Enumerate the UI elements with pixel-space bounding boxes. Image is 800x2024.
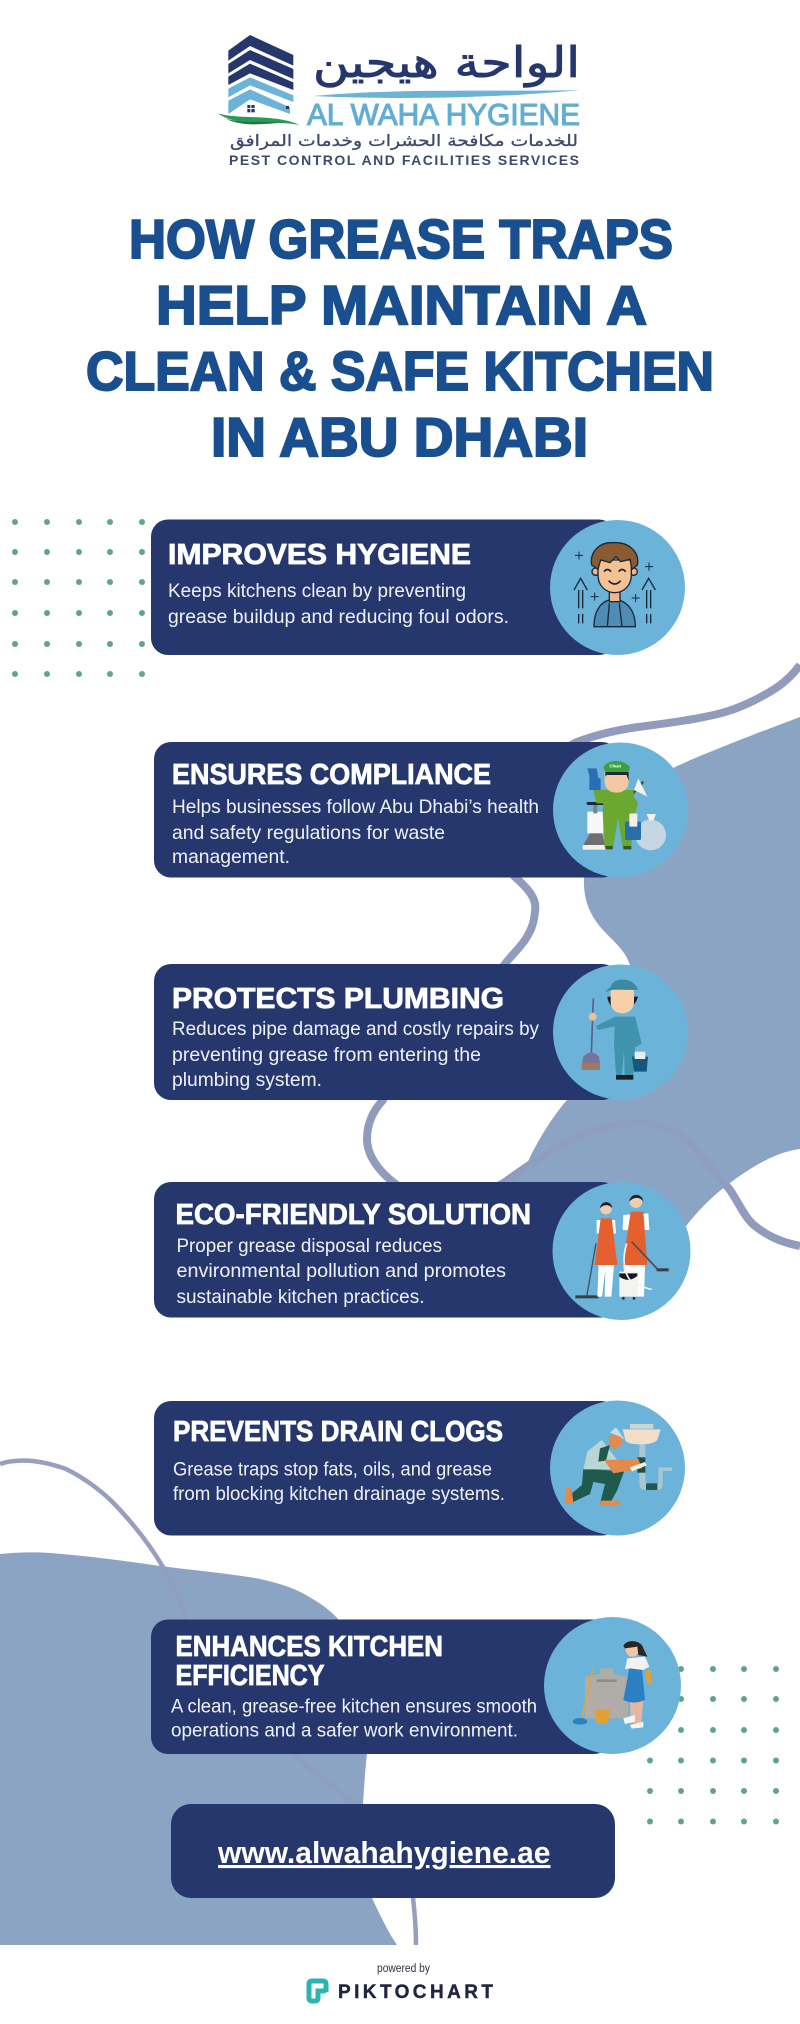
logo: Al Waha Hygiene <box>218 35 580 168</box>
logo: Arabic tagline: للخدمات مكافحة الحشرات وخدمات المرافق <box>230 131 578 151</box>
logo: English name: AL WAHA HYGIENE <box>307 98 580 132</box>
text: ensures compliance <box>172 796 539 868</box>
logo mark: building chevrons <box>218 35 300 125</box>
text: eco-friendly solution: sustainable kitchen practices. <box>176 1286 424 1308</box>
title: HOW GREASE TRAPS <box>129 209 673 270</box>
icon: plumber fixing a sink <box>564 1424 672 1505</box>
heading: ensures compliance: ENSURES COMPLIANCE <box>172 759 491 791</box>
text: prevents drain clogs: Grease traps stop fats, oils, and grease <box>173 1458 492 1480</box>
panel: improves hygiene <box>151 520 685 655</box>
icon circle <box>552 1182 690 1320</box>
title <box>86 209 714 468</box>
text: enhances kitchen efficiency: operations and a safer work environment. <box>171 1720 518 1742</box>
heading: eco-friendly solution: ECO-FRIENDLY SOLUTION <box>176 1199 531 1231</box>
icon circle <box>553 742 688 878</box>
text: protects plumbing <box>172 1018 539 1091</box>
text: ensures compliance: Helps businesses follow Abu Dhabi’s health <box>172 796 539 818</box>
footer: powered by Piktochart <box>309 1963 493 2003</box>
logo: swoosh <box>313 90 580 98</box>
icon: happy clean man with arrows <box>574 543 655 627</box>
decorative curve: lower left <box>0 1460 416 1945</box>
icon circle <box>550 1400 685 1536</box>
text: prevents drain clogs: from blocking kitchen drainage systems. <box>173 1483 505 1505</box>
title: IN ABU DHABI <box>211 407 588 468</box>
logo: Arabic name: الواحة هيجين <box>313 38 580 87</box>
heading: enhances kitchen efficiency: EFFICIENCY <box>176 1660 324 1692</box>
text: eco-friendly solution <box>176 1235 506 1308</box>
panel: eco-friendly solution <box>154 1182 690 1320</box>
call to action: website <box>171 1804 615 1898</box>
logo: tagline: PEST CONTROL AND FACILITIES SERVICES <box>229 152 579 168</box>
icon: woman cleaner with broom and bucket <box>582 980 648 1080</box>
dot grid: bottom right <box>647 1666 779 1824</box>
text: enhances kitchen efficiency: A clean, grease-free kitchen ensures smooth <box>171 1696 537 1718</box>
text: ensures compliance: and safety regulations for waste <box>172 822 445 844</box>
heading: prevents drain clogs: PREVENTS DRAIN CLOGS <box>173 1416 503 1448</box>
text: protects plumbing: Reduces pipe damage and costly repairs by <box>172 1018 539 1040</box>
title: CLEAN & SAFE KITCHEN <box>86 341 714 402</box>
footer: powered by Piktochart: PIKTOCHART <box>338 1982 493 2003</box>
heading: improves hygiene: IMPROVES HYGIENE <box>168 539 471 571</box>
background blob: lower left <box>0 1552 397 1945</box>
heading: enhances kitchen efficiency: ENHANCES KITCHEN <box>176 1631 443 1663</box>
icon: green cleaner with tools: Clean <box>609 763 621 768</box>
icon: green cleaner with tools <box>583 761 666 850</box>
text: enhances kitchen efficiency <box>171 1696 537 1742</box>
icon circle <box>553 964 688 1100</box>
text: prevents drain clogs <box>173 1458 505 1505</box>
icon circle <box>544 1617 681 1754</box>
icon circle <box>550 520 685 655</box>
text: eco-friendly solution: environmental pollution and promotes <box>176 1260 506 1282</box>
heading: protects plumbing: PROTECTS PLUMBING <box>172 983 504 1015</box>
icon: two cleaners with mop and vacuum <box>575 1195 669 1300</box>
website address: www.alwahahygiene.ae <box>217 1835 550 1870</box>
text: protects plumbing: preventing grease from entering the <box>172 1044 481 1066</box>
icon: woman cleaning a stove <box>573 1641 652 1729</box>
text: improves hygiene <box>168 580 509 628</box>
background blob: upper right <box>502 717 800 1300</box>
footer: powered by Piktochart: powered by <box>377 1963 430 1975</box>
icon: Piktochart logo mark <box>309 1981 326 2001</box>
text: improves hygiene: Keeps kitchens clean by preventing <box>168 580 466 602</box>
decorative curve: right <box>367 665 800 1246</box>
panel: prevents drain clogs <box>154 1400 685 1536</box>
dot grid: top left <box>12 519 145 677</box>
text: improves hygiene: grease buildup and reducing foul odors. <box>168 606 509 628</box>
text: protects plumbing: plumbing system. <box>172 1069 322 1091</box>
heading: enhances kitchen efficiency <box>176 1631 443 1692</box>
text: eco-friendly solution: Proper grease disposal reduces <box>176 1235 442 1257</box>
title: HELP MAINTAIN A <box>156 275 647 336</box>
panel: protects plumbing <box>154 964 688 1100</box>
text: ensures compliance: management. <box>172 846 290 868</box>
footer white band <box>0 1945 800 2024</box>
panel: ensures compliance <box>154 742 688 878</box>
panel: enhances kitchen efficiency <box>151 1617 681 1754</box>
